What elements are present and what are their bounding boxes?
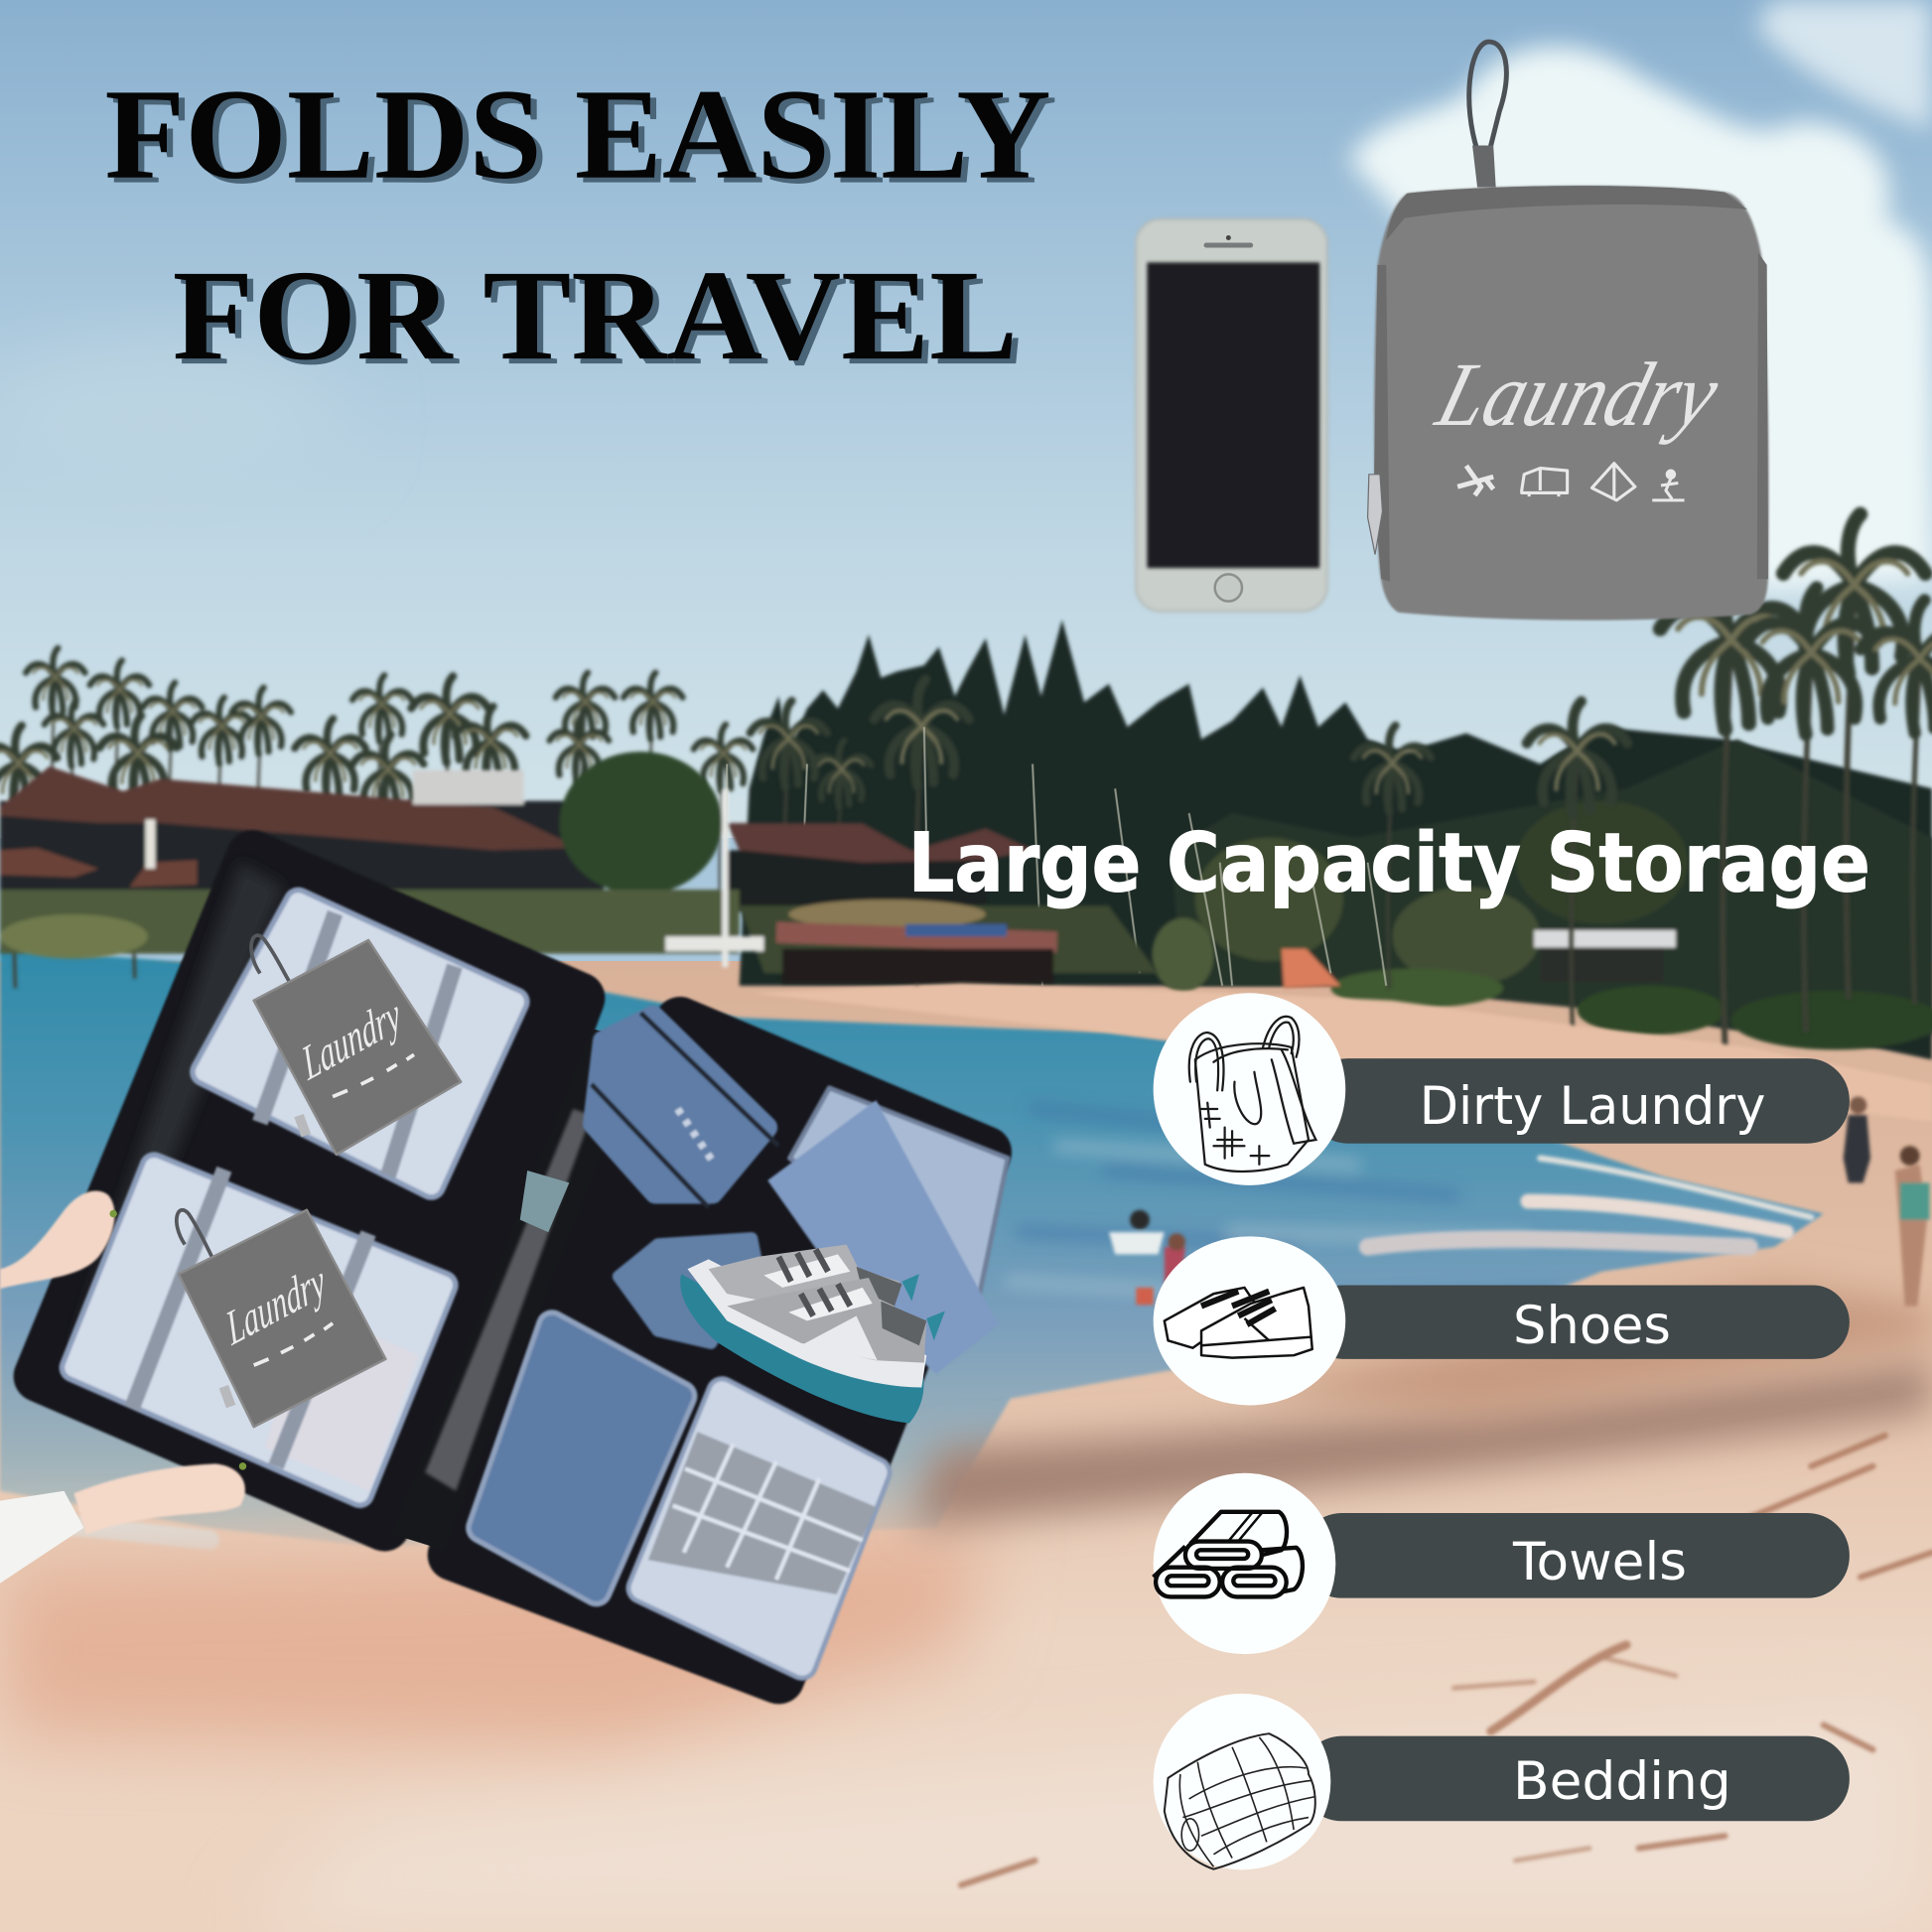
laundry pouch bottom xyxy=(177,1210,385,1427)
hand top-left xyxy=(0,1190,117,1289)
icon: rolled towels xyxy=(1154,1512,1303,1596)
left lining xyxy=(73,863,283,1368)
treeline: right foliage xyxy=(1152,740,1932,1049)
upper beach strip xyxy=(752,983,1932,1134)
icon: laundry basket xyxy=(1189,1017,1315,1172)
title text: FOLDS EASILY xyxy=(104,64,1051,207)
palm trees xyxy=(0,514,1932,1054)
open suitcase with packing cubes xyxy=(0,857,1008,1678)
smartphone for size comparison xyxy=(1136,219,1327,612)
item: Dirty Laundry xyxy=(1154,993,1850,1185)
clouds xyxy=(0,0,1932,592)
pill: Shoes xyxy=(1307,1285,1850,1359)
title shadow: FOLDS EASILY xyxy=(111,69,1057,211)
circle: Towels xyxy=(1154,1473,1335,1654)
title shadow xyxy=(111,69,1057,392)
label: Bedding: Bedding xyxy=(1513,1752,1731,1812)
drawstring bag large xyxy=(592,1013,778,1207)
icon: sneakers xyxy=(1165,1288,1312,1358)
bag script label: Laundry xyxy=(1426,345,1729,446)
grey packing cube xyxy=(642,1392,876,1665)
pill: Bedding xyxy=(1300,1736,1850,1821)
surf foam xyxy=(0,1159,1811,1540)
label: Shoes: Shoes xyxy=(1513,1297,1671,1356)
treeline: pines xyxy=(740,620,1932,1059)
circle: Bedding xyxy=(1154,1694,1330,1869)
pill: Towels xyxy=(1300,1513,1850,1598)
title: Folds easily for travel xyxy=(104,64,1057,392)
travel icons on bag xyxy=(1457,464,1685,500)
packing cube top-left xyxy=(205,901,515,1185)
packing cube bottom-left xyxy=(73,1167,444,1493)
sea xyxy=(0,949,1824,1547)
drawstring bag small xyxy=(619,1238,758,1343)
title text: FOR TRAVEL xyxy=(173,244,1018,387)
mesh divider xyxy=(425,1109,592,1491)
sandy beach base xyxy=(0,961,1932,1932)
flat pouch back xyxy=(790,1088,1008,1294)
carabiner xyxy=(1469,42,1506,150)
icon: folded blanket xyxy=(1165,1733,1315,1869)
sky xyxy=(0,0,1932,838)
title text xyxy=(104,64,1051,387)
sand shading xyxy=(0,1282,1932,1932)
item: Shoes xyxy=(1154,1236,1850,1405)
label: Dirty Laundry: Dirty Laundry xyxy=(1420,1077,1765,1137)
bag body xyxy=(1374,186,1769,621)
folded laundry bag xyxy=(1368,42,1769,621)
people on the beach xyxy=(1109,1097,1930,1307)
item: Bedding xyxy=(1154,1694,1850,1869)
suitcase right shell xyxy=(454,1023,986,1678)
hand bottom-left with sleeve xyxy=(0,1462,246,1584)
resort buildings xyxy=(0,752,1159,983)
label: Towels: Towels xyxy=(1512,1533,1687,1592)
laundry pouch top xyxy=(251,935,461,1155)
circle: Dirty Laundry xyxy=(1154,993,1345,1185)
item: Towels xyxy=(1154,1473,1850,1654)
title shadow: FOR TRAVEL xyxy=(179,249,1024,392)
blue packing cube xyxy=(482,1325,681,1590)
laundry pouch bottom: Laundry xyxy=(220,1253,331,1356)
center hinge xyxy=(392,1029,647,1550)
water ripples xyxy=(1011,1109,1553,1307)
footprints in sand xyxy=(961,1436,1932,1885)
thin palm trunks xyxy=(725,727,1386,986)
laundry pouch top: Laundry xyxy=(297,987,406,1092)
pill: Dirty Laundry xyxy=(1307,1058,1850,1144)
circle: Shoes xyxy=(1154,1236,1345,1405)
flat pouch front xyxy=(767,1100,998,1374)
clipart sneakers xyxy=(680,1244,945,1423)
zipper pull xyxy=(1368,475,1382,554)
suitcase left shell xyxy=(40,857,579,1525)
